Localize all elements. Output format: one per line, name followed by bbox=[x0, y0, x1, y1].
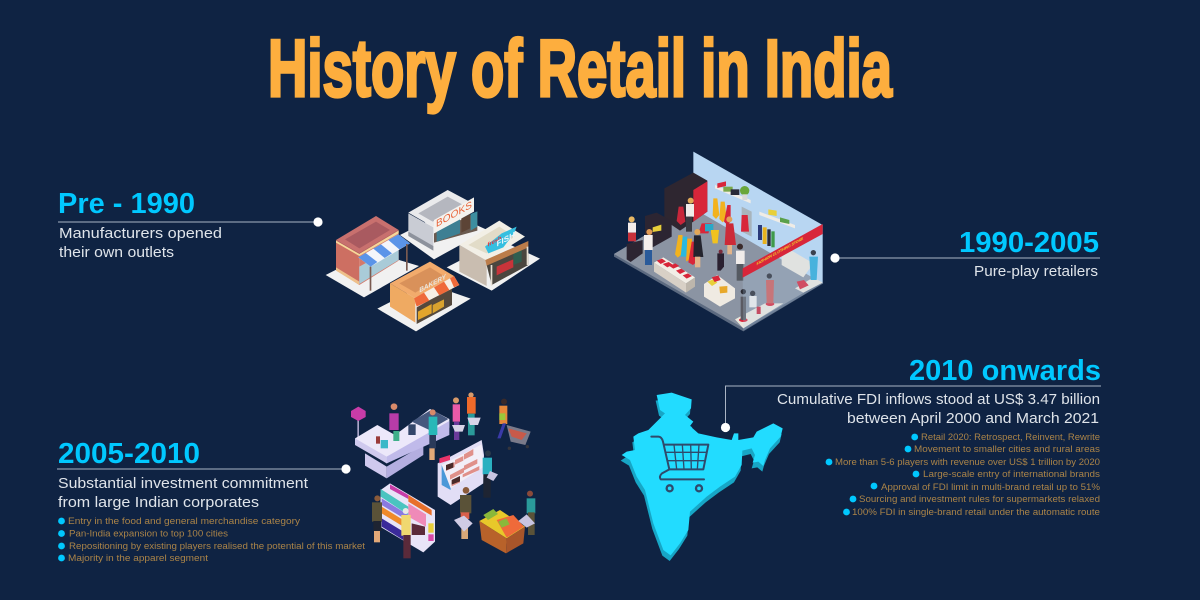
text: 2005-2010 description bbox=[58, 475, 309, 511]
text: 2005-2010 description: from large Indian corporates bbox=[58, 494, 259, 511]
bullet list: 2010 onwards: Sourcing and investment rules for supermarkets relaxed bbox=[859, 494, 1100, 505]
checkout counter and cashier bbox=[351, 403, 449, 478]
store banner: FASHION CLOTHING STORE bbox=[757, 236, 803, 266]
text: 2010 onwards description: between April 2000 and March 2021 bbox=[847, 410, 1099, 427]
bullet list: 2010 onwards: Retail 2020: Retrospect, Reinvent, Rewrite bbox=[921, 432, 1100, 443]
people and mannequins bbox=[628, 198, 823, 328]
store back wall bbox=[693, 152, 823, 283]
text: 2010 onwards description: Cumulative FDI inflows stood at US$ 3.47 billion bbox=[777, 391, 1100, 408]
shop: bakery: BAKERY bbox=[419, 272, 446, 295]
shop: bakery bbox=[377, 262, 471, 331]
illustration: isometric fashion store bbox=[614, 152, 823, 331]
illustration: four isometric shops bbox=[326, 190, 540, 331]
connector: 2010 onwards bbox=[721, 386, 1101, 432]
bullet list: 2010 onwards: Movement to smaller cities and rural areas bbox=[914, 444, 1100, 455]
connector: 2005-2010 bbox=[57, 464, 351, 474]
heading: Pre - 1990: Pre - 1990 bbox=[58, 188, 195, 220]
heading: 2005-2010: 2005-2010 bbox=[58, 438, 200, 470]
text: pre-1990 description: Manufacturers opened bbox=[59, 225, 222, 242]
text: pre-1990 description: their own outlets bbox=[59, 244, 174, 261]
text: 2005-2010 description: Substantial investment commitment bbox=[58, 475, 309, 492]
shoppers bbox=[429, 392, 531, 460]
connector: 1990-2005 bbox=[830, 253, 1100, 263]
shop: red store with blue awning bbox=[326, 216, 419, 297]
bullet list: 2010 onwards bbox=[826, 432, 1100, 518]
dark wardrobe and red curtain bbox=[664, 173, 707, 231]
icon: shopping cart bbox=[651, 437, 708, 491]
bullet list: 2010 onwards: Approval of FDI limit in multi-brand retail up to 51% bbox=[881, 482, 1100, 493]
store floor bbox=[614, 206, 823, 331]
shop: fresh fish: FISH bbox=[497, 230, 515, 249]
illustration: supermarket bbox=[351, 392, 535, 558]
bullet list: 2010 onwards: More than 5-6 players with revenue over US$ 1 trillion by 2020 bbox=[835, 457, 1100, 468]
panel: 1990-2005 bbox=[830, 227, 1100, 280]
shop: books: BOOKS bbox=[436, 199, 472, 230]
bullet list: 2005-2010: Pan-India expansion to top 100 cities bbox=[69, 528, 228, 540]
store banner bbox=[743, 224, 823, 278]
bullet list: 2005-2010 bbox=[58, 516, 365, 564]
heading: 1990-2005: 1990-2005 bbox=[959, 227, 1099, 259]
checkout counter bbox=[627, 213, 672, 262]
text: pre-1990 description bbox=[59, 225, 222, 261]
shopper with basket bbox=[454, 487, 473, 539]
heading: 2010 onwards: 2010 onwards bbox=[909, 355, 1101, 387]
bullet list: 2005-2010: Repositioning by existing players realised the potential of this market bbox=[69, 541, 365, 552]
bullet list: 2010 onwards: 100% FDI in single-brand retail under the automatic route bbox=[852, 507, 1100, 518]
title: History of Retail in India bbox=[268, 24, 893, 114]
bullet list: 2005-2010: Entry in the food and general merchandise category bbox=[68, 516, 300, 527]
text: 2010 onwards description bbox=[777, 391, 1100, 427]
shop: books bbox=[400, 190, 487, 259]
front glass bbox=[743, 234, 823, 331]
map surface bbox=[622, 393, 783, 555]
panel: pre-1990 bbox=[58, 188, 323, 261]
illustration: India map with shopping cart bbox=[621, 393, 783, 561]
panel: 2005-2010 bbox=[57, 438, 365, 564]
bullet list: 2005-2010: Majority in the apparel segment bbox=[68, 553, 208, 564]
bullet list: 2010 onwards: Large-scale entry of international brands bbox=[923, 469, 1100, 480]
map extrusion bbox=[621, 398, 782, 561]
table displays bbox=[654, 251, 813, 307]
produce crate bbox=[479, 491, 535, 553]
shop: fresh fish bbox=[447, 221, 540, 291]
wall shelves bbox=[715, 181, 795, 228]
panel: 2010 onwards bbox=[721, 355, 1101, 518]
shop: fresh fish: fresh bbox=[488, 235, 502, 249]
shelf display bbox=[372, 483, 435, 558]
hanging clothes bbox=[675, 198, 775, 265]
refrigerated meat case bbox=[438, 440, 498, 505]
text: 1990-2005 description: Pure-play retailers bbox=[974, 263, 1098, 280]
connector: pre-1990 bbox=[58, 217, 323, 227]
